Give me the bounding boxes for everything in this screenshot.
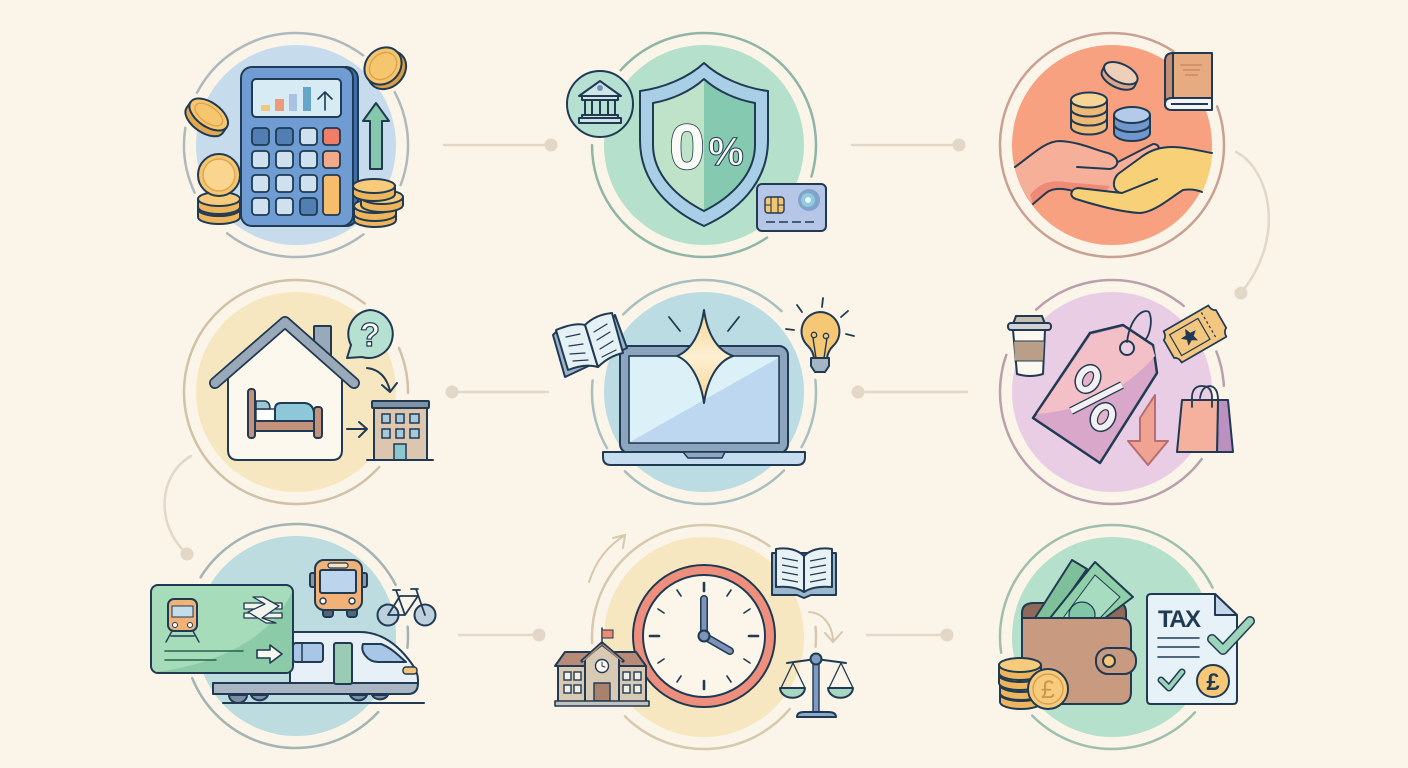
icon: bus <box>310 560 367 617</box>
icon: credit card <box>757 184 826 231</box>
connector: row 2 left <box>446 386 548 398</box>
connector: curve from row 1 to row 2 on right <box>1234 152 1269 300</box>
icon: coffee cup <box>1008 316 1051 376</box>
background disc <box>604 537 804 737</box>
icon: gold coin stack <box>1071 92 1107 134</box>
icon: bicycle <box>378 589 436 626</box>
icon: blue coin stack <box>1114 107 1150 141</box>
panel: helping hands with coins <box>968 1 1256 289</box>
background disc <box>1012 292 1212 492</box>
icon: laptop <box>603 346 805 465</box>
icon: calculator <box>241 67 358 226</box>
icon: wallet back <box>1022 603 1126 625</box>
ring <box>138 478 454 768</box>
panel: zero percent shield <box>549 0 859 300</box>
shield text: % <box>708 130 744 174</box>
icon: bank badge <box>567 71 633 137</box>
ring <box>955 235 1269 549</box>
icon: balance scale <box>780 654 853 717</box>
icon: left hand <box>1015 141 1159 204</box>
background disc <box>604 45 804 245</box>
icon: pound coin <box>1028 669 1068 709</box>
icon: sparkle rays <box>669 317 739 331</box>
icon: house <box>215 322 354 460</box>
icon: big coin <box>198 154 240 196</box>
ring <box>968 1 1256 289</box>
icon: green up arrow <box>363 103 389 169</box>
icon: coin stack right <box>353 179 403 227</box>
icon: coin stack <box>999 658 1042 709</box>
ring <box>145 0 447 296</box>
connector: row 3 left <box>459 628 546 642</box>
connector: row 3 right <box>867 628 954 642</box>
icon: speech bubble with question: ? <box>360 316 380 353</box>
connector: curve from row 2 to row 3 on left <box>165 456 194 560</box>
panel: house and student accommodation <box>149 245 443 539</box>
icon: curved arrow right <box>809 612 842 642</box>
icon: train <box>213 632 424 703</box>
icon: wallet <box>1022 618 1136 704</box>
icon: down arrow <box>1128 395 1168 465</box>
ring <box>149 245 443 539</box>
icon: railcard <box>151 585 293 673</box>
shield text <box>669 111 744 183</box>
icon: bed <box>248 389 322 438</box>
icon: sparkle <box>677 310 733 403</box>
background disc <box>1012 537 1212 737</box>
icon: tax document: TAX <box>1158 606 1201 633</box>
ring <box>583 516 825 758</box>
icon: tax document <box>1147 594 1237 704</box>
icon: open book <box>553 313 627 377</box>
ring <box>581 269 827 515</box>
ring <box>549 0 859 300</box>
icon: apartment building <box>367 401 433 460</box>
icon: shopping bag <box>1177 386 1233 452</box>
icon: card arrow <box>257 645 282 663</box>
icon: curved arrow top left <box>589 535 625 582</box>
icon: right hand <box>1071 147 1212 213</box>
panel: wallet and tax <box>954 479 1270 768</box>
icon: large green check <box>1212 621 1250 650</box>
connector: row 1 right <box>852 138 966 152</box>
background disc <box>1012 45 1212 245</box>
icon: price tag <box>1033 311 1157 463</box>
icon: tax document: £ <box>1206 669 1220 696</box>
panel: calculator budgeting <box>145 0 447 296</box>
background disc <box>196 45 396 245</box>
background disc <box>604 292 804 492</box>
icon: school building <box>555 628 649 706</box>
icon: coin stack left <box>198 192 240 224</box>
icon: floating coin left <box>180 92 234 143</box>
icon: banknotes <box>1035 560 1133 628</box>
background disc <box>196 292 396 492</box>
arrow: bubble to building <box>367 368 397 392</box>
connector: row 1 left <box>444 138 558 152</box>
icon: clock <box>633 565 775 707</box>
panel: discount tag <box>955 235 1269 549</box>
icon: open book <box>772 548 836 598</box>
icon: floating coin top right <box>357 40 414 97</box>
icon: light bulb <box>786 298 854 372</box>
panel: railcard and transport <box>138 478 454 768</box>
icon: ticket <box>1160 303 1230 365</box>
background disc <box>196 536 396 736</box>
icon: rail double arrow <box>244 597 282 623</box>
panel: clock and time management <box>555 516 853 758</box>
icon: book <box>1165 53 1212 110</box>
panel: laptop learning <box>553 269 854 515</box>
icon: shield <box>640 63 768 226</box>
icon: speech bubble with question <box>347 310 393 358</box>
icon: pound coin: £ <box>1041 676 1055 704</box>
ring <box>954 479 1270 768</box>
shield text: 0 <box>669 111 705 183</box>
icon: floating coin <box>1098 57 1141 94</box>
tag percent <box>1070 360 1122 436</box>
arrow: house to building <box>347 422 367 437</box>
connector: row 2 right <box>852 386 967 398</box>
